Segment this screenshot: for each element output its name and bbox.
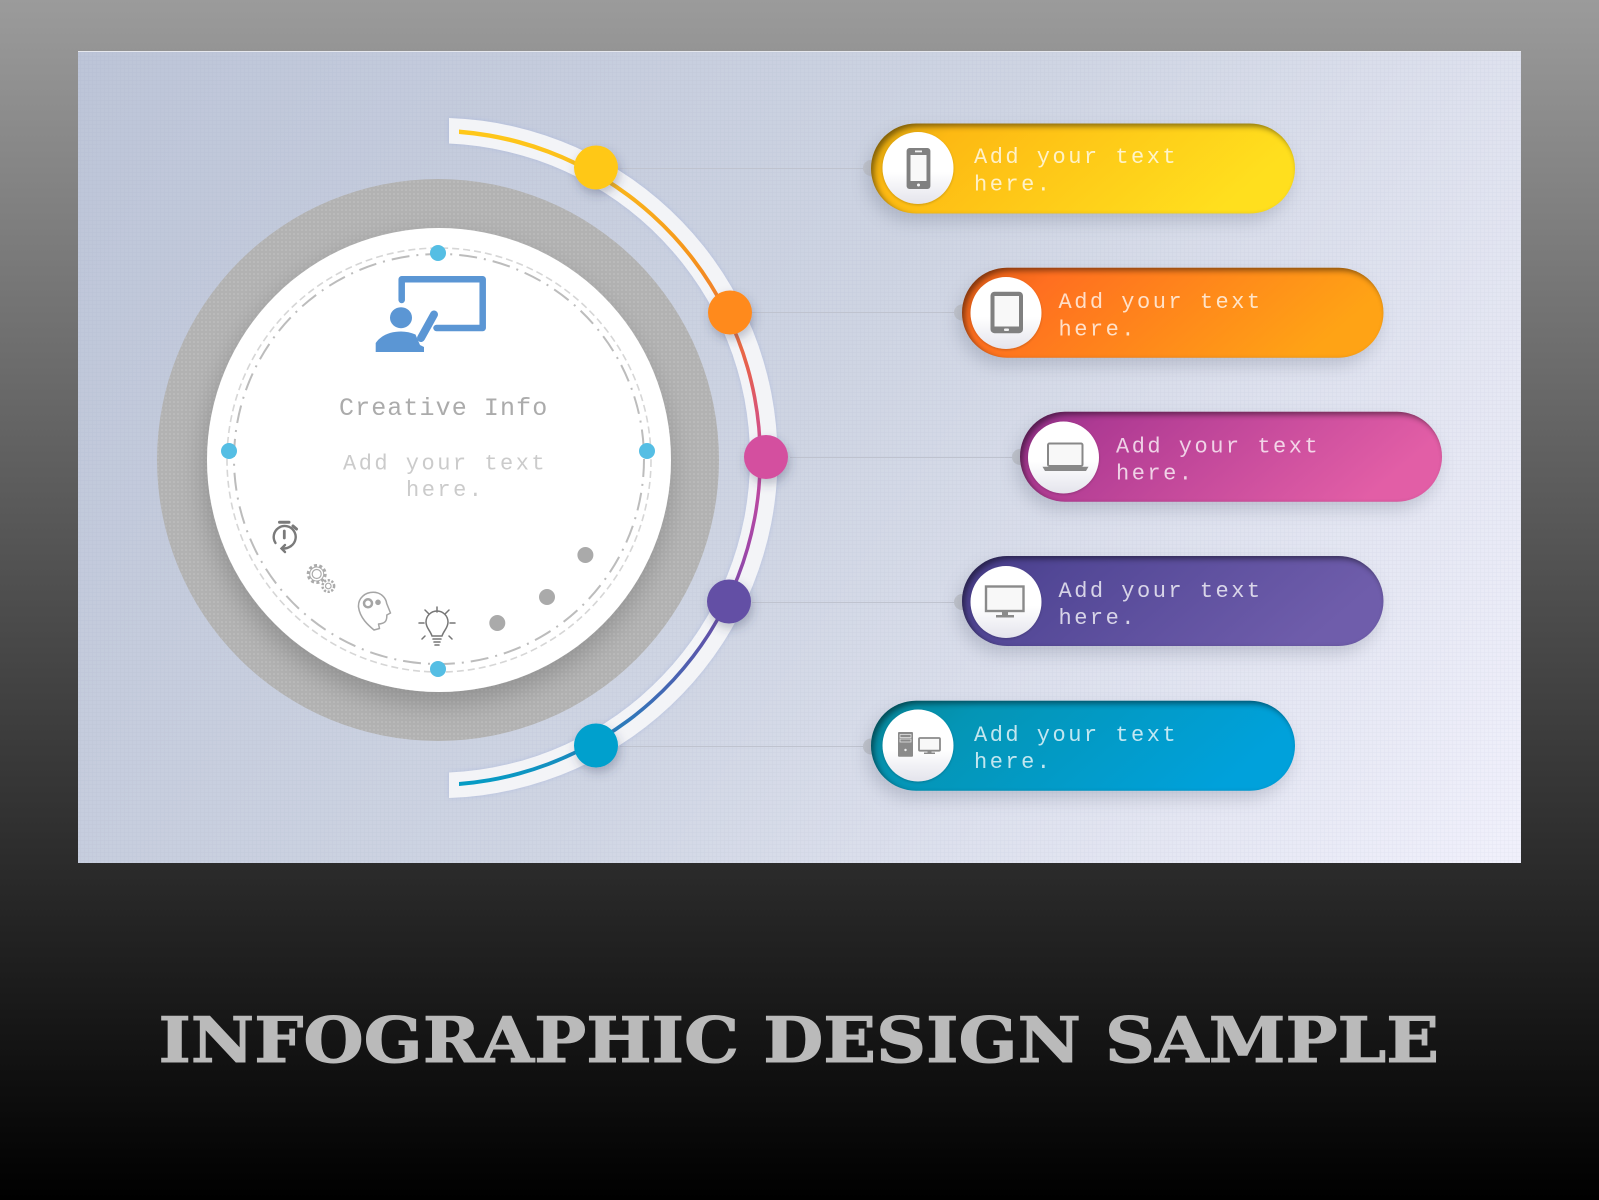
title: INFOGRAPHIC DESIGN SAMPLE: [158, 1003, 1439, 1077]
text: here.: [1058, 606, 1137, 631]
teal marker dots: [221, 245, 655, 677]
text: center description: Add your text: [343, 452, 547, 476]
text: here.: [974, 750, 1053, 775]
text: Add your text: [1058, 579, 1263, 604]
text: Add your text: [1058, 290, 1263, 315]
text: here.: [974, 172, 1053, 198]
pill 1: yellow, phone: [871, 124, 1295, 214]
icon: gears: [308, 566, 334, 592]
text: [974, 723, 1178, 775]
icon chip: monitor: [970, 566, 1042, 638]
arc knobs: [574, 146, 788, 768]
text: [1116, 434, 1320, 486]
icon chip: laptop: [1028, 422, 1099, 494]
text: center description: here.: [406, 478, 485, 503]
text: [974, 145, 1178, 198]
icon: head with gears: [358, 592, 390, 630]
icon: stopwatch: [274, 522, 296, 552]
icon: presenter at board: [376, 279, 483, 352]
text: Add your text: [974, 723, 1178, 748]
connector lines to the pills: [620, 160, 1028, 754]
pill 4: purple, monitor: [962, 556, 1384, 646]
icon chip: tablet: [970, 277, 1042, 349]
pill 3: magenta, laptop: [1020, 412, 1442, 502]
text: here.: [1058, 318, 1137, 342]
heading: Creative Info: Creative Info: [339, 394, 548, 423]
icon chip: desktop: [882, 710, 954, 782]
icon chip: phone: [882, 132, 954, 204]
text: [1058, 290, 1263, 342]
dash-dot ring: inner: [234, 254, 644, 664]
icon: light bulb: [419, 607, 455, 645]
panel: infographic card: [78, 51, 1521, 863]
text: center description: [343, 452, 547, 503]
pill 2: orange, tablet: [962, 268, 1384, 358]
arc gradient line: [459, 130, 762, 786]
arc band: [449, 118, 778, 798]
text: Add your text: [1116, 434, 1320, 460]
text: here.: [1116, 462, 1195, 486]
text: [1058, 579, 1263, 631]
pill 5: blue, desktop computer: [871, 701, 1295, 791]
gray placeholder dots: [489, 547, 593, 631]
dashed ring: outer: [227, 248, 651, 672]
central white disc: [207, 228, 671, 692]
outer gray ring: [157, 179, 719, 741]
text: Add your text: [974, 145, 1178, 170]
